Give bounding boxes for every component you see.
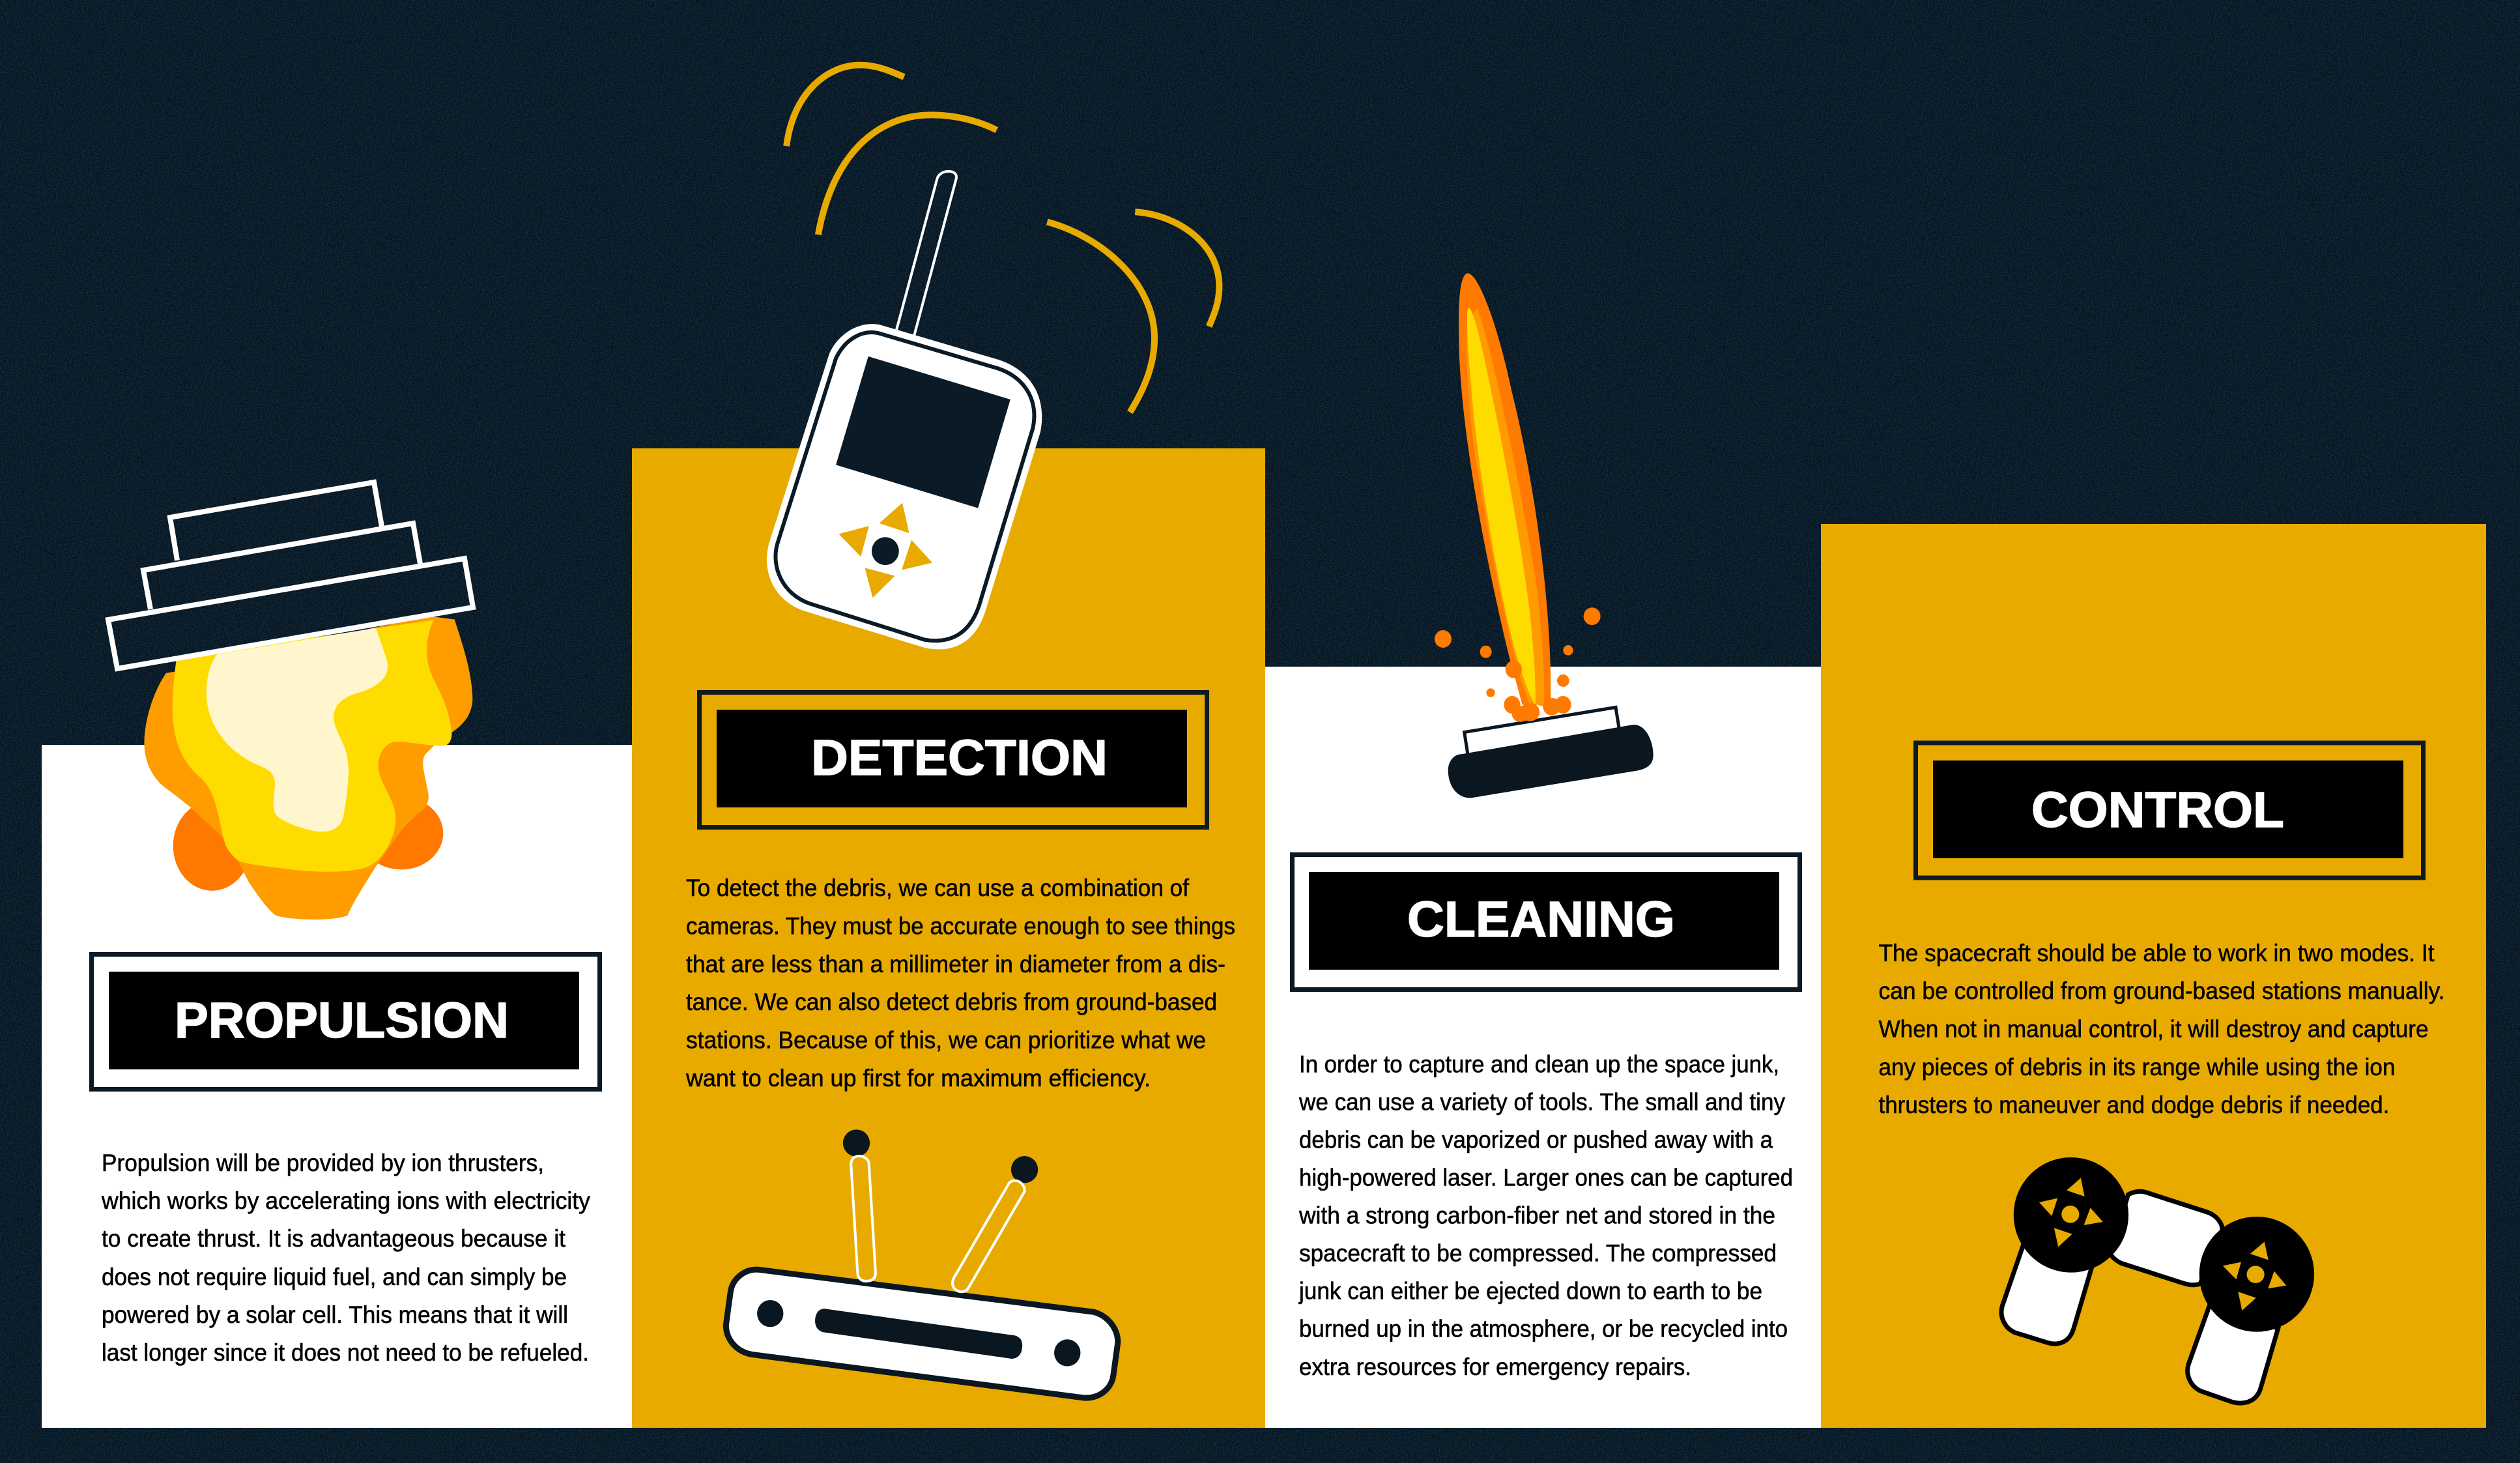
- text: cleaning description: extra resources for emergency repairs.: [1299, 1354, 1691, 1380]
- heading: detection: [700, 692, 1207, 828]
- text: detection description: want to clean up first for maximum efficiency.: [685, 1065, 1151, 1092]
- icon: ion thruster with flame: [108, 482, 473, 920]
- text: control description: thrusters to maneuver and dodge debris if needed.: [1879, 1092, 2390, 1118]
- icon: game controller: [2001, 1157, 2314, 1403]
- heading: control: [1915, 743, 2424, 878]
- text: control description: can be controlled from ground-based stations manually.: [1879, 978, 2444, 1004]
- heading: control: CONTROL: [2031, 782, 2284, 838]
- text: cleaning description: [1298, 1050, 1793, 1380]
- heading: propulsion: [91, 954, 599, 1090]
- heading: propulsion: PROPULSION: [175, 992, 509, 1049]
- panel background: detection: [632, 448, 1265, 1428]
- panel: control: [1821, 524, 2486, 1428]
- sparks: [1435, 607, 1601, 722]
- scanner body: [767, 324, 1042, 649]
- heading: cleaning: CLEANING: [1407, 891, 1675, 948]
- flame: [144, 616, 472, 920]
- text: propulsion description: to create thrust. It is advantageous because it: [102, 1225, 566, 1252]
- text: cleaning description: we can use a variety of tools. The small and tiny: [1298, 1088, 1785, 1116]
- panel background: control: [1821, 524, 2486, 1428]
- text: cleaning description: In order to capture and clean up the space junk,: [1299, 1050, 1779, 1078]
- text: propulsion description: last longer since it does not need to be refueled.: [102, 1339, 589, 1366]
- signal waves: [786, 65, 1219, 413]
- text: cleaning description: spacecraft to be compressed. The compressed: [1299, 1239, 1777, 1267]
- text: cleaning description: debris can be vaporized or pushed away with a: [1299, 1126, 1773, 1153]
- thruster stacked plates: [108, 482, 473, 669]
- text: propulsion description: [101, 1150, 590, 1366]
- text: detection description: To detect the debris, we can use a combination of: [686, 875, 1190, 901]
- text: cleaning description: with a strong carbon-fiber net and stored in the: [1298, 1202, 1775, 1229]
- text: detection description: stations. Because of this, we can prioritize what we: [686, 1027, 1206, 1053]
- emitter base: [1465, 707, 1620, 756]
- antenna: [896, 171, 956, 335]
- text: detection description: [685, 875, 1235, 1092]
- heading: cleaning: [1293, 855, 1799, 989]
- text: cleaning description: high-powered laser. Larger ones can be captured: [1299, 1164, 1793, 1191]
- text: propulsion description: does not require liquid fuel, and can simply be: [102, 1264, 567, 1290]
- text: propulsion description: powered by a solar cell. This means that it will: [102, 1301, 568, 1328]
- text: propulsion description: which works by accelerating ions with electricity: [101, 1187, 590, 1214]
- panel: cleaning: [1265, 273, 1821, 1428]
- text: detection description: cameras. They must be accurate enough to see things: [686, 912, 1235, 940]
- text: control description: When not in manual control, it will destroy and capture: [1879, 1015, 2429, 1043]
- text: control description: any pieces of debris in its range while using the ion: [1879, 1054, 2395, 1080]
- text: detection description: tance. We can also detect debris from ground-based: [686, 989, 1217, 1015]
- icon: laser emitter with beam: [1435, 273, 1654, 798]
- text: cleaning description: burned up in the atmosphere, or be recycled into: [1299, 1315, 1788, 1342]
- text: control description: [1879, 940, 2444, 1118]
- panel: detection: [632, 65, 1265, 1428]
- text: control description: The spacecraft should be able to work in two modes. It: [1879, 940, 2435, 966]
- laser beam: [1459, 273, 1551, 705]
- panel: propulsion: [42, 482, 632, 1428]
- icon: ground station receiver: [726, 1129, 1118, 1398]
- heading: detection: DETECTION: [811, 730, 1108, 786]
- text: detection description: that are less than a millimeter in diameter from a dis-: [686, 951, 1225, 978]
- icon: handheld scanner with signal waves: [767, 65, 1219, 649]
- text: cleaning description: junk can either be ejected down to earth to be: [1298, 1277, 1762, 1305]
- panel background: cleaning: [1265, 667, 1821, 1428]
- text: propulsion description: Propulsion will be provided by ion thrusters,: [102, 1150, 544, 1176]
- panel background: propulsion: [42, 745, 632, 1428]
